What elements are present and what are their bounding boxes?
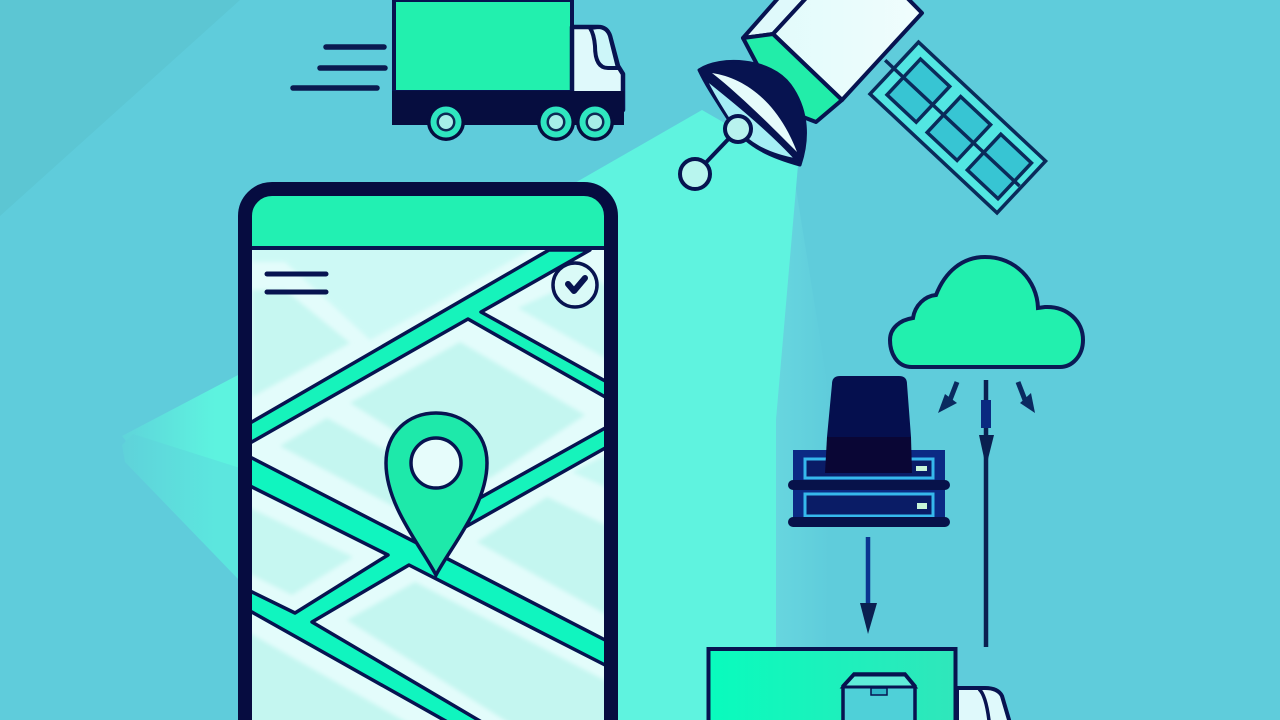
antenna nodes bbox=[680, 116, 751, 189]
cloud bbox=[890, 257, 1083, 367]
map pin bbox=[386, 413, 487, 575]
phone screen map bbox=[252, 248, 605, 720]
smartphone bbox=[245, 189, 612, 720]
arrow: server to truck bbox=[860, 537, 877, 634]
road: upper with branch bbox=[250, 250, 607, 443]
satellite bbox=[680, 0, 1046, 213]
phone header line bbox=[252, 246, 605, 250]
arrows from cloud bbox=[938, 380, 1035, 647]
cab bottom bbox=[957, 688, 1012, 720]
satellite dish bbox=[699, 61, 805, 165]
city blocks bbox=[248, 244, 612, 720]
server indicator lights bbox=[916, 466, 927, 509]
wheels bbox=[427, 103, 614, 141]
satellite body bbox=[743, 0, 922, 122]
menu icon bbox=[267, 274, 326, 292]
delivery truck: top bbox=[293, 0, 624, 141]
phone header bbox=[252, 196, 605, 248]
road: right of pin bbox=[460, 427, 607, 530]
phone frame bbox=[245, 189, 611, 720]
check badge bbox=[553, 263, 597, 307]
chassis bbox=[392, 91, 624, 125]
tower lower bbox=[825, 437, 912, 473]
cargo bottom bbox=[708, 649, 956, 720]
parcel bbox=[843, 674, 915, 720]
road: main with lower branches bbox=[250, 457, 607, 720]
signal beam from satellite bbox=[122, 110, 798, 720]
cab bbox=[572, 27, 623, 110]
roads bbox=[250, 250, 607, 720]
arrow: cloud right bbox=[1018, 382, 1035, 413]
arrow: cloud left bbox=[938, 382, 957, 413]
solar panel bbox=[861, 34, 1046, 213]
server rack bbox=[793, 450, 945, 525]
delivery truck: bottom bbox=[708, 649, 1012, 720]
tower upper bbox=[827, 376, 911, 437]
server drawers bbox=[805, 459, 933, 516]
speed lines bbox=[293, 47, 385, 88]
server with tower bbox=[788, 376, 950, 527]
cargo box bbox=[394, 0, 572, 92]
arrow: cloud to truck line bbox=[979, 380, 994, 647]
server bars bbox=[788, 480, 950, 527]
